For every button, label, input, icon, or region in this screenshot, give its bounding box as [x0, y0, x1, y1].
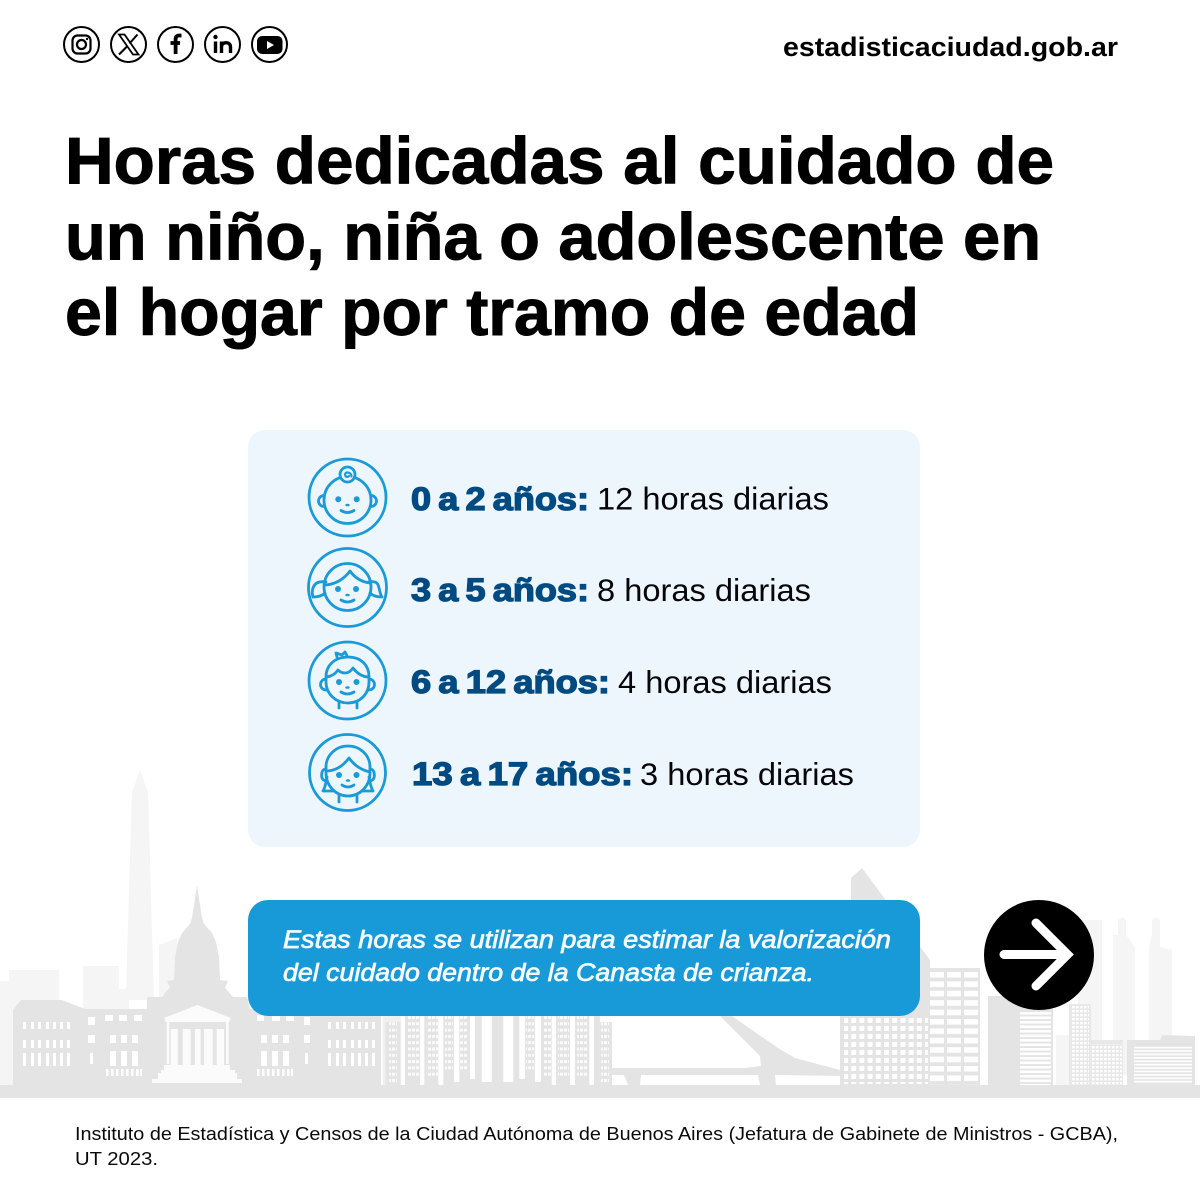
title: el hogar por tramo de edad [65, 275, 919, 349]
skyline background [0, 770, 1200, 1098]
row: 6 a 12 años [309, 642, 832, 719]
website address: estadisticaciudad.gob.ar [783, 32, 1119, 62]
row: 13 a 17 años [310, 734, 854, 810]
icon: teen [310, 734, 386, 810]
callout: del cuidado dentro de la Canasta de crianza. [283, 959, 814, 987]
icon: LinkedIn [205, 27, 240, 62]
social icons [64, 27, 287, 62]
icon: YouTube [252, 27, 287, 62]
icon: baby [309, 459, 386, 536]
palace windows [23, 1005, 375, 1083]
title [65, 124, 1054, 349]
light background buildings [0, 770, 1172, 1085]
value: 3 horas diarias: 3 horas diarias [640, 756, 854, 792]
label: 13 a 17 años: 13 a 17 años: [412, 756, 633, 792]
icon: Instagram [64, 27, 99, 62]
title: Horas dedicadas al cuidado de [65, 124, 1054, 198]
label: 0 a 2 años: 0 a 2 años: [411, 481, 589, 517]
source note: UT 2023. [75, 1149, 158, 1169]
callout [248, 900, 920, 1016]
icon: little girl [308, 548, 386, 626]
value: 8 horas diarias: 8 horas diarias [597, 572, 811, 608]
value: 4 horas diarias: 4 horas diarias [618, 664, 832, 700]
palace of Congress silhouette [13, 885, 381, 1085]
panel: age ranges [248, 430, 920, 847]
label: 3 a 5 años: 3 a 5 años: [411, 572, 589, 608]
central buildings [383, 1016, 612, 1085]
label: 6 a 12 años: 6 a 12 años: [411, 664, 610, 700]
right side buildings [840, 868, 1195, 1085]
arrow button [984, 900, 1094, 1010]
row: 3 a 5 años [308, 548, 811, 626]
icon: X [111, 27, 146, 62]
icon: Facebook [158, 27, 193, 62]
callout: Estas horas se utilizan para estimar la valorización [283, 926, 891, 954]
title: un niño, niña o adolescente en [65, 200, 1041, 274]
Puente de la Mujer bridge [612, 1016, 842, 1085]
source note [75, 1124, 1118, 1169]
source note: Instituto de Estadística y Censos de la Ciudad Autónoma de Buenos Aires (Jefatura de Gabinete de Ministros - GCBA), [75, 1124, 1118, 1144]
icon: boy [309, 642, 386, 719]
row: 0 a 2 años [309, 459, 829, 536]
value: 12 horas diarias: 12 horas diarias [597, 480, 829, 516]
ground strip [0, 1085, 1200, 1098]
